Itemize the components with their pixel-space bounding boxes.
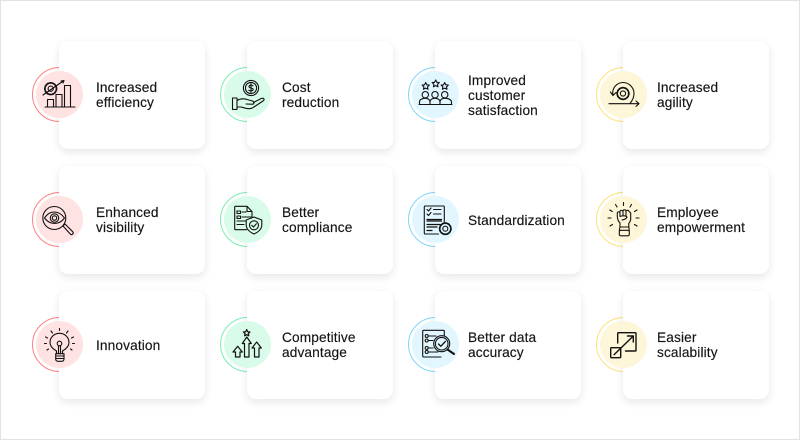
panel: Enhanced visibility xyxy=(32,174,207,279)
label xyxy=(96,205,159,236)
label xyxy=(282,330,356,360)
label: accuracy xyxy=(468,345,524,360)
panel: Innovation xyxy=(32,300,207,404)
label: Increased xyxy=(657,80,718,95)
label: Competitive xyxy=(282,330,356,345)
panel: Cost reduction xyxy=(220,50,395,154)
icon disc xyxy=(600,71,647,118)
icon: gear with looping arrow xyxy=(608,82,640,107)
icon disc xyxy=(600,196,647,243)
icon disc xyxy=(412,71,459,118)
icon disc xyxy=(600,321,647,368)
accent ring xyxy=(596,67,651,122)
icon disc xyxy=(224,196,271,243)
label: Increased xyxy=(96,80,157,95)
accent ring xyxy=(32,192,87,247)
panel: Standardization xyxy=(408,174,583,279)
icon disc xyxy=(224,71,271,118)
panel: Better data accuracy xyxy=(408,300,583,404)
icon: coin over open hand xyxy=(232,80,265,110)
card xyxy=(59,291,205,399)
icon: document with magnifier check xyxy=(422,330,455,358)
icon disc xyxy=(36,321,83,368)
card xyxy=(247,41,393,149)
label xyxy=(96,80,157,110)
icon: scaling squares with diagonal arrow xyxy=(610,332,637,358)
card xyxy=(59,41,205,149)
accent ring xyxy=(32,67,87,122)
accent ring xyxy=(408,317,463,372)
label xyxy=(657,330,718,360)
accent ring xyxy=(408,192,463,247)
panel: Increased efficiency xyxy=(32,50,207,154)
accent ring xyxy=(596,192,651,247)
label xyxy=(468,330,536,360)
label: customer xyxy=(468,88,525,102)
label xyxy=(282,205,352,236)
label: empowerment xyxy=(657,220,745,235)
card xyxy=(59,166,205,274)
icon: eye in magnifying glass xyxy=(42,206,74,236)
label: satisfaction xyxy=(468,102,538,118)
panel: Competitive advantage xyxy=(220,300,395,404)
panel: Increased agility xyxy=(596,50,771,154)
icon disc xyxy=(36,196,83,243)
label: Employee xyxy=(657,205,719,220)
card xyxy=(623,41,769,149)
label xyxy=(657,80,718,110)
label xyxy=(657,205,745,236)
icon: three stars over three people xyxy=(418,79,452,105)
icon: document with shield check xyxy=(234,206,262,234)
icon disc xyxy=(412,196,459,243)
label: efficiency xyxy=(96,95,154,110)
label: agility xyxy=(657,95,693,110)
panel: Improved customer satisfaction xyxy=(408,50,583,154)
label: reduction xyxy=(282,95,339,110)
card xyxy=(623,291,769,399)
accent ring xyxy=(32,317,87,372)
label: scalability xyxy=(657,345,718,360)
icon: gear and bar chart xyxy=(42,80,76,108)
label: Enhanced xyxy=(96,205,159,220)
panel: Easier scalability xyxy=(596,300,771,404)
label: Better data xyxy=(468,330,536,345)
label: advantage xyxy=(282,345,347,360)
icon: light bulb with rays xyxy=(44,328,75,362)
accent ring xyxy=(596,317,651,372)
label: compliance xyxy=(282,220,352,235)
accent ring xyxy=(408,67,463,122)
panel: Better compliance xyxy=(220,174,395,279)
card xyxy=(435,41,581,149)
panel: Employee empowerment xyxy=(596,174,771,279)
label: Innovation xyxy=(96,338,160,352)
label: Better xyxy=(282,205,319,220)
icon disc xyxy=(412,321,459,368)
icon disc xyxy=(224,321,271,368)
icon: checklist with gear xyxy=(424,206,452,236)
accent ring xyxy=(220,317,275,372)
accent ring xyxy=(220,192,275,247)
card xyxy=(247,291,393,399)
card xyxy=(435,166,581,274)
card xyxy=(247,166,393,274)
icon disc xyxy=(36,71,83,118)
label: Easier xyxy=(657,330,697,345)
label xyxy=(468,72,538,118)
card xyxy=(623,166,769,274)
label: Standardization xyxy=(468,212,565,228)
label: Cost xyxy=(282,80,311,95)
label: Improved xyxy=(468,72,526,88)
accent ring xyxy=(220,67,275,122)
icon: three up arrows and star xyxy=(232,328,262,358)
icon: raised fist with rays xyxy=(608,202,640,236)
card xyxy=(435,291,581,399)
label xyxy=(282,80,339,110)
label: visibility xyxy=(96,220,144,235)
